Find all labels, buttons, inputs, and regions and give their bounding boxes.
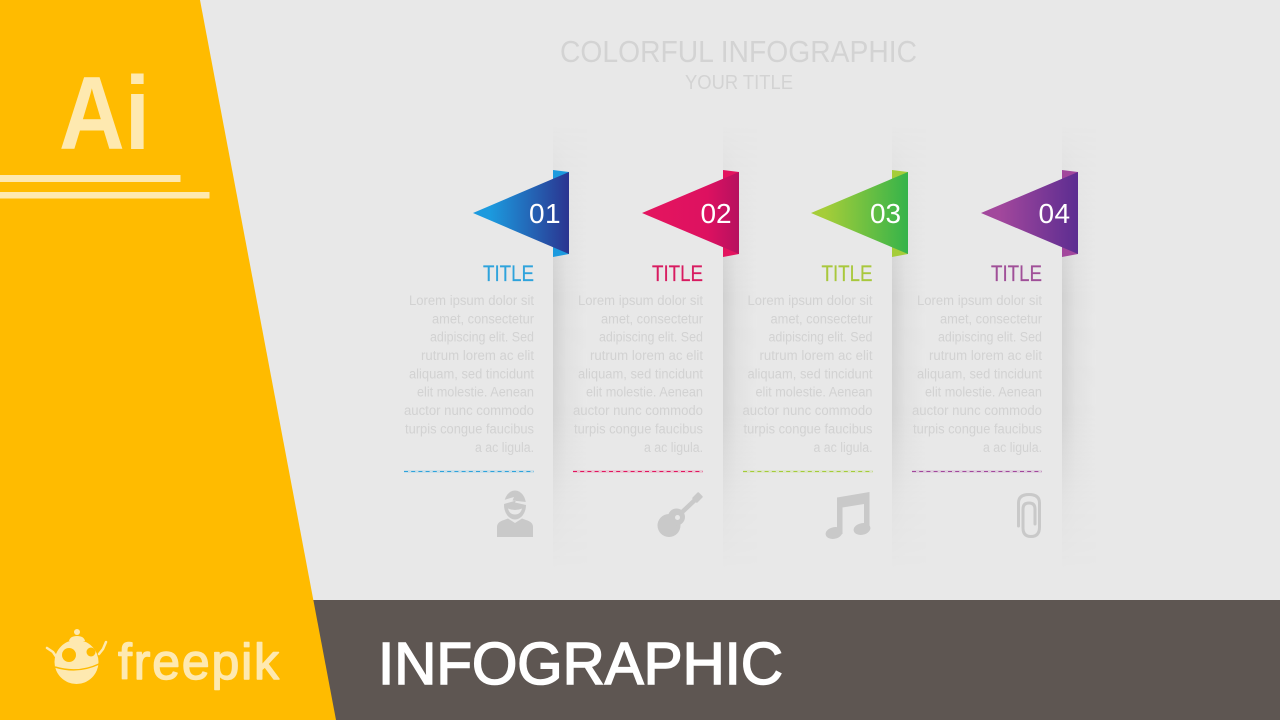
text block 3: adipiscing elit. Sed: [768, 330, 872, 345]
text block 3: Lorem ipsum dolor sit: [748, 293, 873, 308]
panel: column 2: [573, 170, 739, 537]
text block 2: auctor nunc commodo: [573, 403, 703, 418]
arrow flag 2: [642, 172, 739, 254]
bottom band: [300, 600, 1280, 720]
text block 3: a ac ligula.: [814, 440, 872, 455]
icon: freepik robot: [47, 629, 106, 684]
heading: main title: COLORFUL INFOGRAPHIC: [560, 34, 917, 69]
text block 1: a ac ligula.: [475, 440, 534, 455]
icon: person with glasses: [497, 490, 533, 537]
banner title: INFOGRAPHIC: [378, 631, 783, 697]
text block 1: adipiscing elit. Sed: [430, 330, 534, 345]
text block 4: turpis congue faucibus: [913, 421, 1042, 436]
text block 2: turpis congue faucibus: [574, 421, 703, 436]
yellow side panel: [0, 0, 336, 720]
text block 1: elit molestie. Aenean: [417, 385, 534, 400]
number 03: 03: [870, 198, 901, 229]
number 02: 02: [700, 198, 732, 229]
text block 4: auctor nunc commodo: [912, 403, 1042, 418]
column shadow 1: [553, 256, 566, 486]
text block 2: [573, 293, 703, 455]
text block 3: auctor nunc commodo: [742, 403, 872, 418]
text block 4: Lorem ipsum dolor sit: [917, 293, 1042, 308]
dashed divider 2: [573, 470, 703, 473]
text block 4: amet, consectetur: [940, 311, 1042, 326]
number 04: 04: [1038, 198, 1070, 229]
text block 1: aliquam, sed tincidunt: [409, 366, 534, 381]
panel: column 1: [404, 170, 569, 537]
text block 3: rutrum lorem ac elit: [760, 348, 873, 363]
icon: guitar: [658, 492, 703, 537]
decorative logo underlines: [0, 175, 210, 198]
number 01: 01: [529, 198, 561, 229]
panel: column 3: [743, 170, 908, 539]
title 2: TITLE: [652, 261, 703, 286]
column shadow 3: [892, 256, 906, 486]
text block 1: Lorem ipsum dolor sit: [409, 293, 534, 308]
dashed divider 3: [743, 470, 873, 473]
text block 2: rutrum lorem ac elit: [590, 348, 703, 363]
text block 4: adipiscing elit. Sed: [938, 330, 1042, 345]
dashed divider 4: [912, 470, 1042, 473]
text block 2: Lorem ipsum dolor sit: [578, 293, 703, 308]
text block 4: elit molestie. Aenean: [925, 385, 1042, 400]
column shadow 2: [723, 256, 736, 486]
icon: music note: [824, 492, 872, 540]
text block 1: amet, consectetur: [432, 311, 534, 326]
text block 4: rutrum lorem ac elit: [929, 348, 1042, 363]
logo text: freepik: freepik: [118, 634, 280, 690]
text block 4: a ac ligula.: [983, 440, 1042, 455]
heading: subtitle: YOUR TITLE: [685, 71, 793, 94]
text block 1: rutrum lorem ac elit: [421, 348, 534, 363]
text block 2: aliquam, sed tincidunt: [578, 366, 703, 381]
text block 3: [742, 293, 873, 455]
text block 3: amet, consectetur: [770, 311, 873, 326]
dashed divider 1: [404, 470, 534, 473]
text block 3: turpis congue faucibus: [744, 421, 873, 436]
column shadow 4: [1062, 256, 1076, 486]
ribbon fold 1: [553, 170, 569, 257]
title 3: TITLE: [822, 261, 872, 286]
title 4: TITLE: [991, 261, 1042, 286]
title 1: TITLE: [483, 261, 534, 286]
arrow flag 4: [981, 172, 1078, 254]
arrow flag 1: [473, 172, 569, 254]
text block 2: a ac ligula.: [644, 440, 703, 455]
text block 2: elit molestie. Aenean: [586, 385, 703, 400]
ribbon fold 4: [1062, 170, 1078, 257]
text block 4: aliquam, sed tincidunt: [917, 366, 1042, 381]
icon: paperclip: [1018, 494, 1040, 536]
text block 2: adipiscing elit. Sed: [599, 330, 703, 345]
text block 1: turpis congue faucibus: [405, 421, 534, 436]
panel: column 4: [912, 170, 1078, 538]
ribbon fold 3: [892, 170, 908, 257]
text block 4: [912, 293, 1042, 455]
logo: Ai: Ai: [59, 56, 150, 172]
text block 1: [404, 293, 534, 455]
text block 1: auctor nunc commodo: [404, 403, 534, 418]
ribbon fold 2: [723, 170, 739, 257]
text block 2: amet, consectetur: [601, 311, 703, 326]
arrow flag 3: [811, 172, 908, 254]
text block 3: aliquam, sed tincidunt: [748, 366, 873, 381]
text block 3: elit molestie. Aenean: [756, 385, 872, 400]
